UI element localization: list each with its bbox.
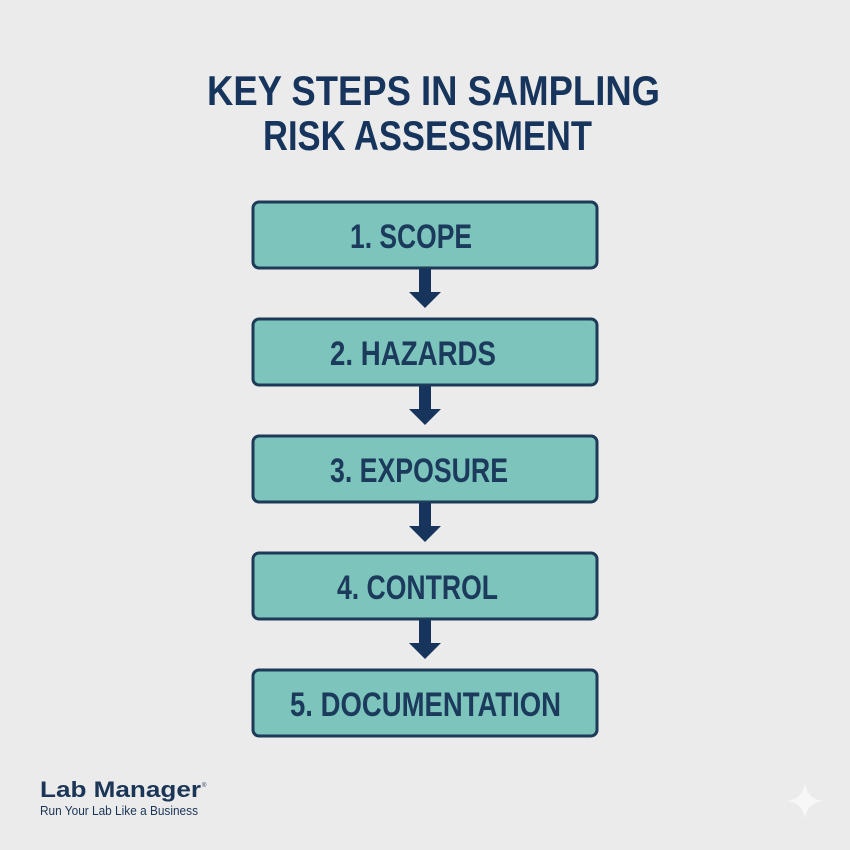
step 5: documentation xyxy=(253,670,597,736)
arrow 4 xyxy=(409,620,441,659)
arrow 2 xyxy=(409,386,441,425)
step 2: hazards xyxy=(253,319,597,385)
logo: Lab Manager: Lab Manager xyxy=(40,777,202,802)
logo: Lab Manager: Run Your Lab Like a Business xyxy=(40,804,198,818)
title: RISK ASSESSMENT xyxy=(263,112,592,159)
icon: sparkle xyxy=(787,783,823,819)
title: KEY STEPS IN SAMPLING xyxy=(207,67,660,114)
step 1: scope: 1. SCOPE xyxy=(350,218,472,256)
arrow 1 xyxy=(409,269,441,308)
logo: Lab Manager: ® xyxy=(202,782,207,789)
step 1: scope xyxy=(253,202,597,268)
step 3: exposure xyxy=(253,436,597,502)
logo: Lab Manager xyxy=(40,777,207,818)
step 4: control xyxy=(253,553,597,619)
title xyxy=(207,67,660,159)
step 2: hazards: 2. HAZARDS xyxy=(330,335,496,373)
step 4: control: 4. CONTROL xyxy=(337,569,498,607)
step 3: exposure: 3. EXPOSURE xyxy=(330,452,508,490)
step 5: documentation: 5. DOCUMENTATION xyxy=(290,686,561,724)
arrow 3 xyxy=(409,503,441,542)
